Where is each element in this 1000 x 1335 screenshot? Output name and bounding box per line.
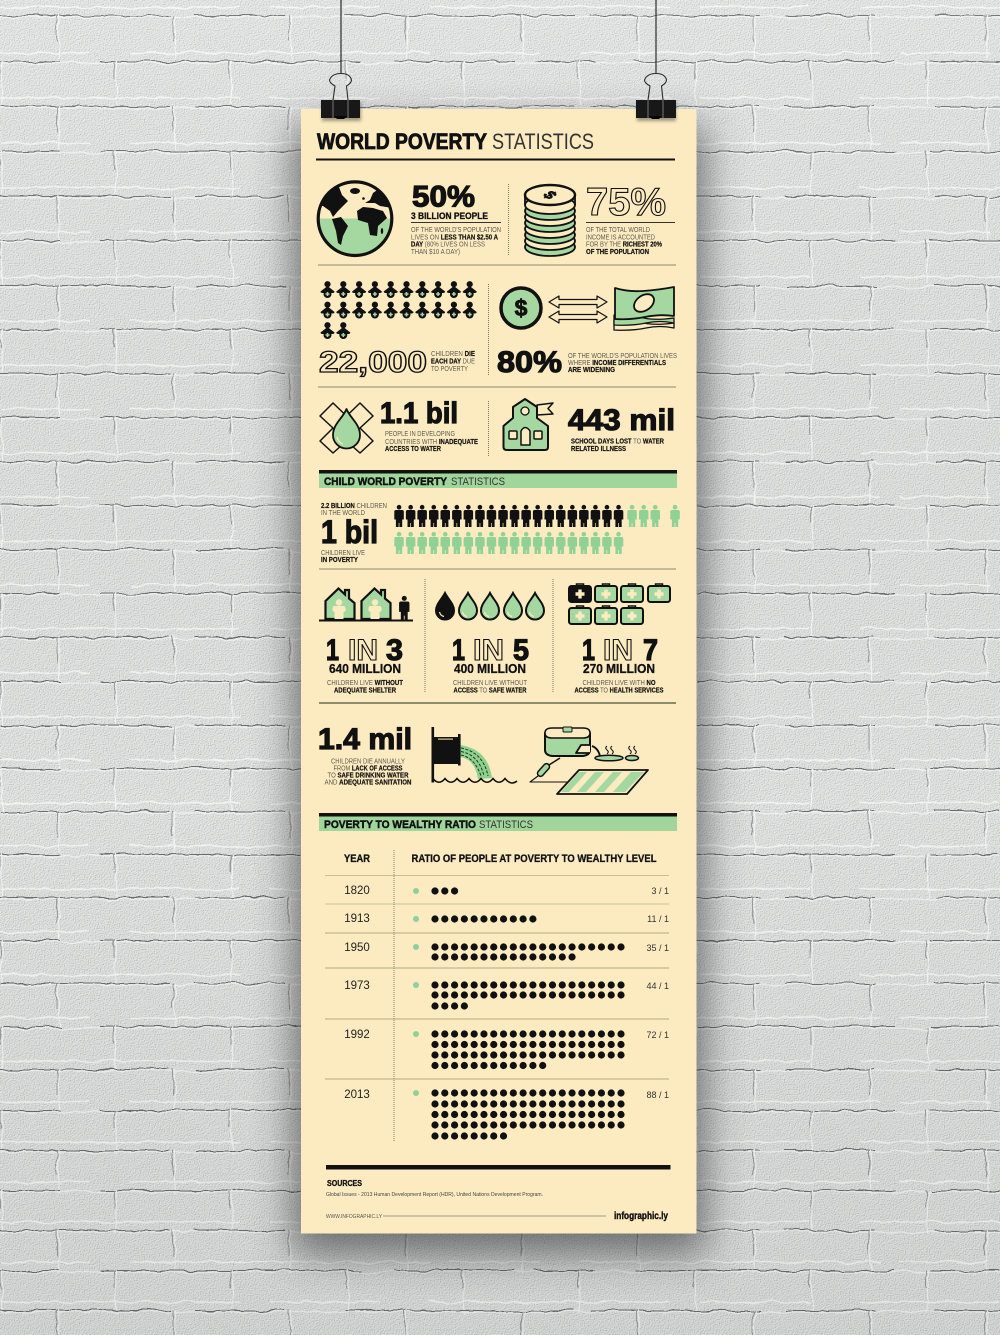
table row 1973: [344, 980, 669, 1006]
table row 1992: 1992: [344, 1029, 370, 1041]
stat: 75 percent: [586, 181, 675, 256]
stat: 50 percent: LIVES ON LESS THAN $2.50 A: [411, 234, 498, 242]
table row 1950: 35 / 1: [646, 943, 669, 953]
stat: 75 percent: OF THE POPULATION: [586, 249, 649, 256]
binder clip: right: [636, 74, 676, 121]
stat: 1 in 7: ACCESS TO HEALTH SERVICES: [574, 688, 664, 694]
sources: [326, 1179, 543, 1198]
hanging cords: [341, 0, 656, 74]
section heading: poverty to wealthy ratio: STATISTICS: [479, 819, 533, 831]
table row 1973: 44 / 1: [646, 981, 669, 991]
stat: 1 in 5: ACCESS TO SAFE WATER: [454, 688, 526, 694]
stat: 22,000 children: EACH DAY DUE: [431, 358, 475, 366]
stat: 80 percent: WHERE INCOME DIFFERENTIALS: [568, 360, 666, 367]
pictogram: children row one: [394, 505, 680, 527]
stat: 1.4 mil: AND ADEQUATE SANITATION: [324, 780, 412, 786]
icon grid: babies: [320, 281, 477, 339]
stat: 443 mil: SCHOOL DAYS LOST TO WATER: [571, 438, 664, 446]
footer credits: infographic.ly: [614, 1211, 668, 1222]
stat: 1 in 3: [326, 634, 404, 694]
stat: 75 percent: FOR BY THE RICHEST 20%: [586, 242, 663, 248]
stat: 1 in 7: 270 MILLION: [583, 662, 655, 676]
icon: water drop on cross: [320, 403, 373, 453]
table row 2013: 88 / 1: [646, 1090, 669, 1100]
icon: double arrows: [549, 296, 607, 323]
stat: 80 percent: 80%: [497, 346, 562, 379]
stat: 1 bil children: CHILDREN LIVE: [321, 550, 365, 557]
poster sheet: [301, 109, 696, 1234]
section heading: child world poverty: STATISTICS: [451, 476, 505, 488]
stat: 80 percent: OF THE WORLD'S POPULATION LIVES: [568, 353, 677, 360]
table row 1950: [344, 942, 669, 957]
stat: 1 in 7: 7: [643, 634, 658, 667]
stat: 50 percent: DAY (80% LIVES ON LESS: [411, 242, 485, 248]
table header: YEAR: [344, 853, 370, 865]
section heading: child world poverty: [319, 470, 677, 488]
stat: 22,000 children: [319, 346, 475, 379]
sources: Global Issues - 2013 Human Development Report (HDR), United Nations Development Program.: [326, 1192, 543, 1198]
stat: 1 in 3: 640 MILLION: [329, 662, 401, 676]
table row 1950: 1950: [344, 942, 370, 954]
footer credits: WWW.INFOGRAPHIC.LY: [326, 1214, 382, 1220]
footer credits: [326, 1211, 668, 1222]
table row 2013: [344, 1089, 669, 1136]
icon: dollar coin: [501, 288, 541, 328]
table row 1820: [344, 885, 669, 897]
stat: 1 bil children: IN THE WORLD: [321, 510, 365, 517]
binder clip: left: [321, 74, 361, 121]
stat: 1 in 7: CHILDREN LIVE WITH NO: [582, 680, 656, 687]
stat: 50 percent: 3 BILLION PEOPLE: [411, 211, 488, 222]
section heading: child world poverty: CHILD WORLD POVERTY: [324, 476, 448, 488]
icon: coin stack: $: [539, 189, 561, 202]
stat: 1 in 5: 1: [452, 634, 465, 667]
stat: 50 percent: THAN $10 A DAY): [411, 249, 460, 256]
stat: 75 percent: 75%: [586, 181, 666, 224]
stat: 1.1 bil: 1.1 bil: [380, 397, 458, 430]
sources: SOURCES: [327, 1179, 363, 1188]
section heading: poverty to wealthy ratio: [319, 813, 677, 831]
icon: coin stack: [525, 185, 575, 256]
stat: 1 in 5: 5: [513, 634, 529, 667]
icon: schoolhouse: [504, 399, 553, 450]
title: WORLD POVERTY: [317, 129, 487, 154]
table header: RATIO OF PEOPLE AT POVERTY TO WEALTHY LEVEL: [412, 853, 657, 865]
icon: cooking pot and mat: [530, 727, 648, 794]
stat: 1 in 3: IN: [348, 634, 378, 667]
icon: houses and child: [319, 588, 413, 622]
poster shadow: [292, 125, 706, 1255]
stat: 1 bil children: IN POVERTY: [321, 557, 358, 564]
stat: 1 in 5: [452, 634, 529, 694]
stat: 22,000 children: CHILDREN DIE: [431, 351, 475, 358]
title: STATISTICS: [492, 129, 594, 154]
icon: dollar coin: $: [515, 295, 528, 321]
table header: [344, 853, 657, 865]
stat: 1 in 3: 1: [326, 634, 339, 667]
table row 1820: 3 / 1: [651, 886, 669, 896]
stat: 75 percent: INCOME IS ACCOUNTED: [586, 234, 655, 242]
table row 1913: 11 / 1: [647, 914, 669, 924]
stat: 1 bil children: 1 bil: [321, 514, 378, 550]
title: [316, 129, 675, 160]
stat: 1 in 3: CHILDREN LIVE WITHOUT: [327, 680, 404, 687]
stat: 80 percent: [497, 346, 677, 379]
table row 2013: 2013: [344, 1089, 370, 1101]
stat: 1 in 3: ADEQUATE SHELTER: [334, 688, 396, 694]
table row 1992: 72 / 1: [646, 1030, 669, 1040]
stat: 443 mil: 443 mil: [568, 404, 675, 437]
stat: 1.1 bil: [380, 397, 478, 453]
stat: 1 bil children: 2.2 BILLION CHILDREN: [321, 503, 387, 510]
stat: 1.1 bil: PEOPLE IN DEVELOPING: [385, 431, 455, 438]
stat: 1.4 mil: CHILDREN DIE ANNUALLY: [331, 758, 405, 766]
stat: 1.1 bil: COUNTRIES WITH INADEQUATE: [385, 439, 478, 446]
table row 1973: 1973: [344, 980, 370, 992]
table row 1913: [344, 913, 669, 925]
table row 1820: 1820: [344, 885, 370, 897]
stat: 443 mil: RELATED ILLNESS: [571, 446, 626, 453]
stat: 1.4 mil: [318, 723, 412, 786]
stat: 1.4 mil: 1.4 mil: [318, 723, 412, 756]
stat: 1 in 7: [574, 634, 664, 694]
footer rule: [326, 1165, 670, 1170]
stat: 22,000 children: TO POVERTY: [431, 366, 468, 373]
stat: 1 in 5: CHILDREN LIVE WITHOUT: [453, 680, 528, 687]
stat: 1 in 3: 3: [386, 634, 403, 667]
icon: medical kits: [569, 584, 670, 624]
stat: 50 percent: [411, 180, 501, 256]
stat: 50 percent: 50%: [412, 180, 475, 214]
icon: banknote: [614, 287, 674, 330]
stat: 22,000 children: 22,000: [319, 346, 427, 379]
stat: 1 bil children: [321, 503, 387, 564]
stat: 1 in 5: IN: [473, 634, 504, 667]
stat: 50 percent: OF THE WORLD'S POPULATION: [411, 227, 501, 234]
stat: 1 in 5: 400 MILLION: [454, 662, 526, 676]
icon: globe: [316, 182, 394, 258]
stat: 1 in 7: 1: [582, 634, 595, 667]
table row 1913: 1913: [344, 913, 370, 925]
stat: 1.4 mil: FROM LACK OF ACCESS: [334, 766, 403, 772]
pictogram: children row two: [394, 532, 623, 554]
icon: water drops: [436, 593, 544, 620]
section heading: poverty to wealthy ratio: POVERTY TO WEALTHY RATIO: [324, 819, 476, 831]
stat: 80 percent: ARE WIDENING: [568, 367, 615, 374]
table row 1992: [344, 1029, 669, 1066]
stat: 1 in 7: IN: [603, 634, 633, 667]
stat: 1.1 bil: ACCESS TO WATER: [385, 446, 441, 453]
stat: 1.4 mil: TO SAFE DRINKING WATER: [328, 772, 408, 780]
stat: 443 mil: [568, 404, 675, 453]
stat: 75 percent: OF THE TOTAL WORLD: [586, 227, 650, 234]
icon: sewage pipe: [432, 727, 517, 783]
